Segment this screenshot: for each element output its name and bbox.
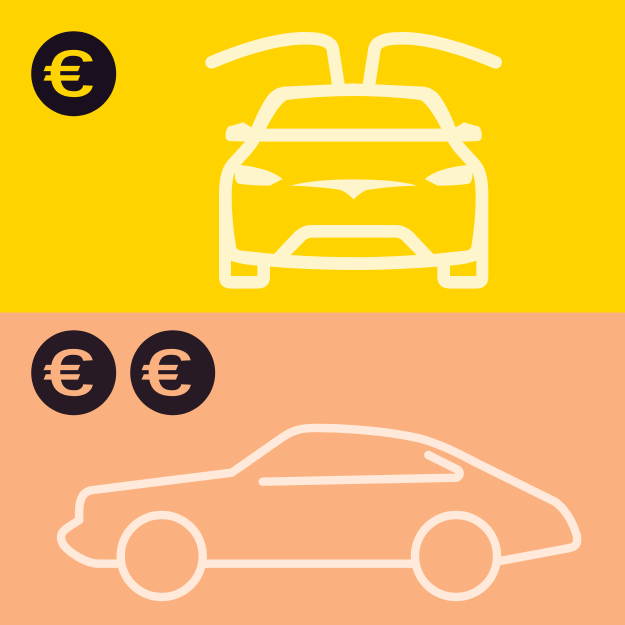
window line <box>263 455 460 482</box>
panel: peach bottom background <box>0 312 625 625</box>
underbody sill <box>205 560 413 568</box>
panel: yellow top background <box>0 0 625 312</box>
icon: second euro coin of two <box>130 330 215 415</box>
icon: one euro coin: € <box>44 38 93 110</box>
icon: one euro coin <box>31 31 116 116</box>
icon: first euro coin of two <box>31 330 116 415</box>
logo emblem <box>290 179 417 199</box>
icon: electric car front view with falcon doors <box>212 38 496 289</box>
icon: classic sports car side view <box>61 428 577 597</box>
car body with windows and grille cut-outs <box>219 83 488 289</box>
rear wheel <box>415 515 497 597</box>
right raised door <box>369 38 496 87</box>
left raised door <box>212 38 339 87</box>
icon: first euro coin of two: € <box>44 337 93 409</box>
car body outline <box>61 428 577 564</box>
icon: second euro coin of two: € <box>142 337 191 409</box>
front wheel <box>121 515 203 597</box>
